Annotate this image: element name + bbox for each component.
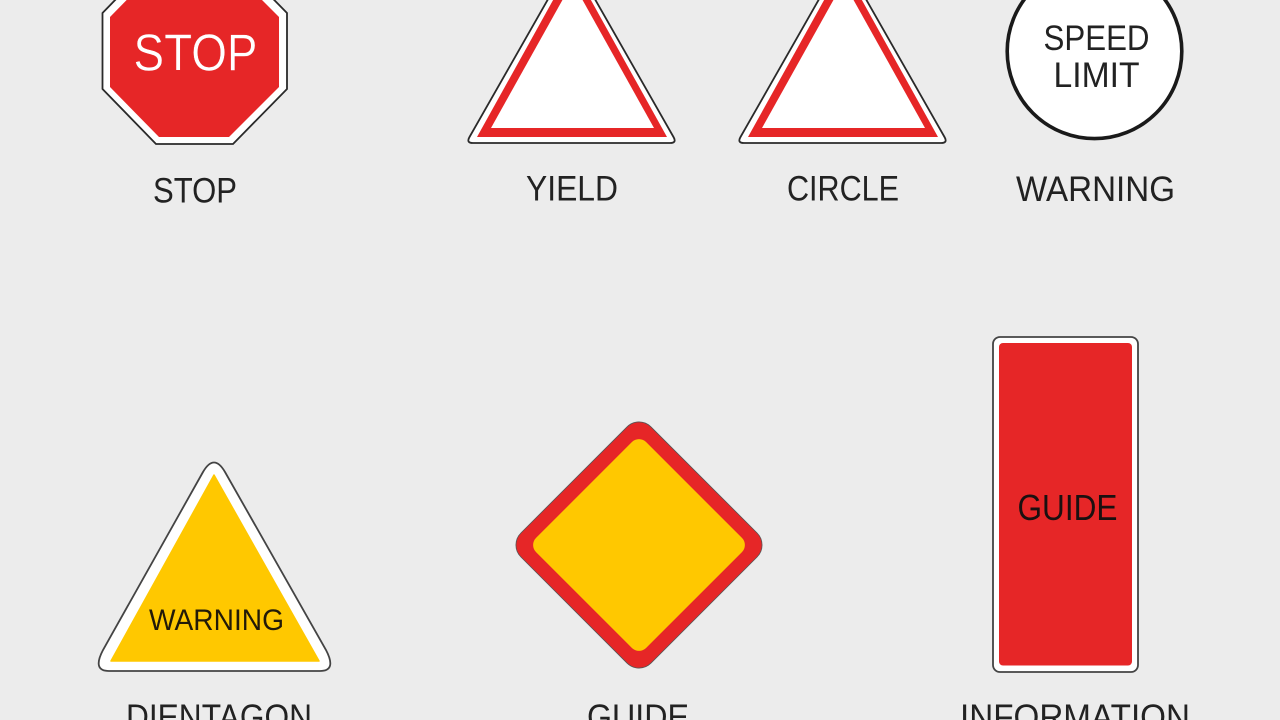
- label: warning top: WARNING: [1016, 169, 1175, 209]
- label: yield: YIELD: [526, 168, 618, 208]
- icon: stop sign: STOP: [134, 24, 258, 82]
- icon: speed limit sign: SPEED: [1044, 19, 1150, 58]
- icon: stop sign: [102, 0, 287, 144]
- icon: speed limit sign: [1007, 0, 1182, 139]
- icon: speed limit sign: LIMIT: [1054, 56, 1140, 95]
- icon: yield triangle: [468, 0, 675, 143]
- icon: guide rectangle: GUIDE: [1018, 487, 1118, 528]
- icon: guide rectangle: [993, 337, 1138, 672]
- icon: diamond sign: [509, 415, 769, 675]
- icon: circle triangle: [739, 0, 946, 143]
- label: stop: STOP: [153, 170, 237, 210]
- icon: warning triangle: [99, 462, 330, 671]
- label: circle: CIRCLE: [787, 168, 899, 208]
- icon: warning triangle: WARNING: [149, 604, 284, 637]
